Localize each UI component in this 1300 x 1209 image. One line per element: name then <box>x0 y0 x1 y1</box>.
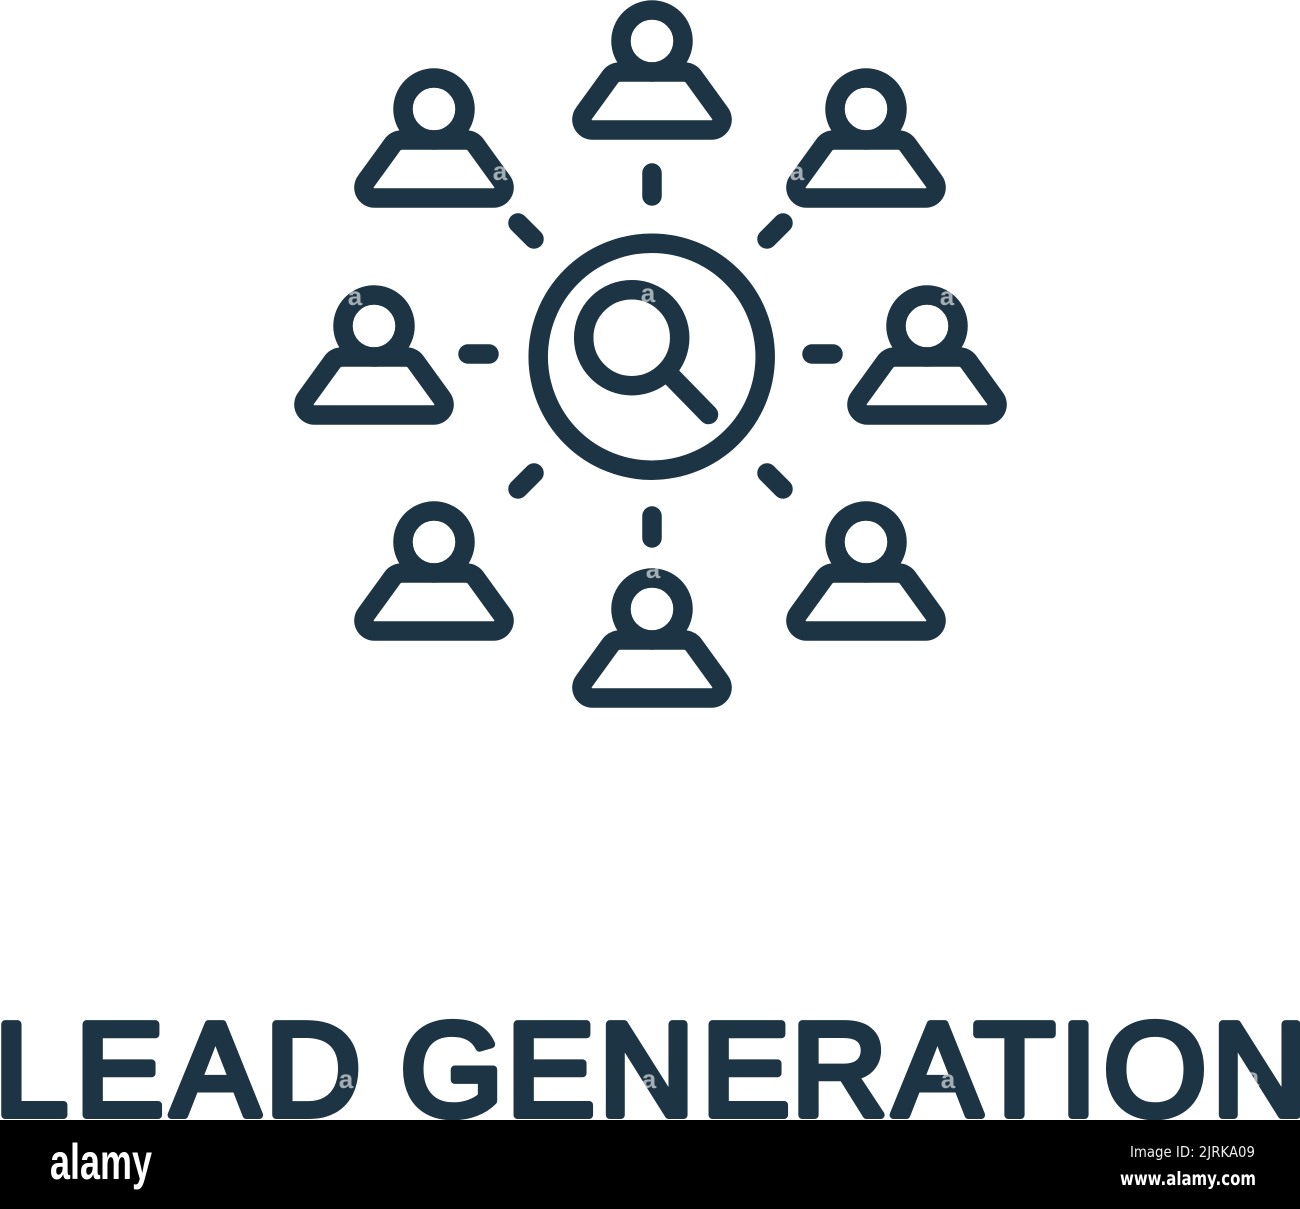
icon: person upper left <box>364 78 504 198</box>
footer logo: alamy <box>50 1134 152 1190</box>
footer band <box>0 1120 1300 1209</box>
title: LEAD GENERATION <box>0 996 1300 1143</box>
watermark marks: a <box>1245 1062 1260 1092</box>
watermark marks: a <box>941 1064 956 1094</box>
icon: person right <box>857 295 997 415</box>
watermark marks: a <box>790 156 805 186</box>
icon: magnifier in circle <box>538 243 765 470</box>
icon: person upper right <box>796 78 936 198</box>
watermark marks: a <box>642 1064 657 1094</box>
icon: person lower left <box>364 511 504 631</box>
connector dashes <box>468 173 833 538</box>
website: www.alamy.com <box>1120 1168 1256 1190</box>
watermark marks: a <box>348 281 363 311</box>
watermark marks <box>339 156 1260 1094</box>
icon: person bottom <box>582 578 722 698</box>
watermark marks: a <box>339 1064 354 1094</box>
icon: lead generation network <box>304 10 997 698</box>
watermark marks: a <box>940 281 955 311</box>
watermark marks: a <box>493 156 508 186</box>
watermark marks: a <box>646 554 661 584</box>
icon: person left <box>304 295 444 415</box>
icon: person top <box>582 10 722 130</box>
watermark marks: a <box>641 278 656 308</box>
image id: Image ID: 2JRKA09 <box>1130 1143 1255 1161</box>
icon: person lower right <box>796 511 936 631</box>
